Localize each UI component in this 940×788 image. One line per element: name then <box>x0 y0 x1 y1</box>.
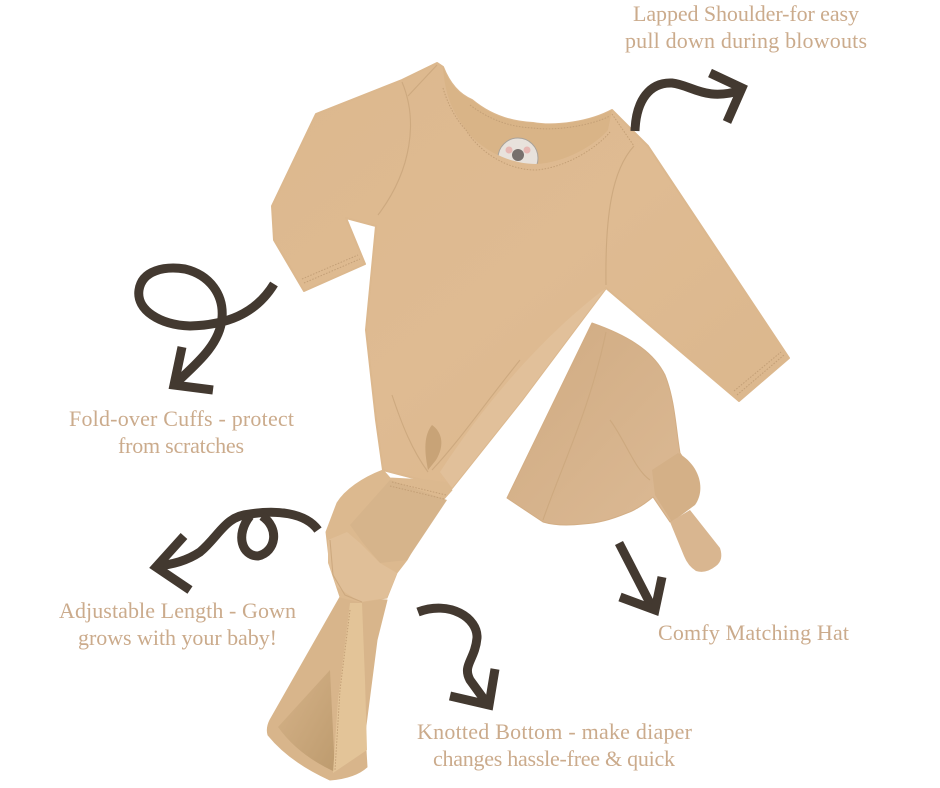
tail stitching <box>335 610 350 770</box>
knot <box>326 470 452 602</box>
hat fold <box>610 420 650 480</box>
label logo <box>498 138 538 164</box>
tail facing <box>333 603 367 773</box>
gown <box>267 63 789 780</box>
body folds <box>440 288 606 488</box>
arrow: cuffs <box>139 268 274 390</box>
cuffs <box>304 259 360 283</box>
arrow: knotted bottom <box>418 608 495 705</box>
sleeve seams <box>378 82 410 215</box>
caption: adjustable length: grows with your baby! <box>78 625 277 650</box>
hat crown <box>507 323 698 525</box>
hat <box>507 323 721 572</box>
gown body and sleeves <box>272 63 789 488</box>
caption: matching hat: Comfy Matching Hat <box>658 620 849 645</box>
neck interior <box>443 67 612 164</box>
knot lower fold <box>328 532 397 602</box>
caption: lapped shoulder: pull down during blowouts <box>625 28 867 53</box>
arrow: adjustable length <box>156 512 318 590</box>
caption: knotted bottom: changes hassle-free & quick <box>433 746 675 771</box>
knot front fold <box>350 480 447 563</box>
arrow: hat <box>619 543 662 610</box>
gown tail <box>267 597 387 780</box>
neckline stitching <box>443 88 610 170</box>
caption: lapped shoulder: Lapped Shoulder-for easy <box>633 1 859 26</box>
caption: lapped shoulder <box>625 1 867 53</box>
caption: adjustable length <box>59 598 296 650</box>
hat brim seam <box>543 332 606 520</box>
caption: knotted bottom <box>417 719 693 771</box>
caption: fold-over cuffs: Fold-over Cuffs - protect <box>69 406 294 431</box>
caption: knotted bottom: Knotted Bottom - make diaper <box>417 719 693 744</box>
caption: fold-over cuffs <box>69 406 294 458</box>
caption: adjustable length: Adjustable Length - Gown <box>59 598 296 623</box>
caption: fold-over cuffs: from scratches <box>118 433 244 458</box>
hat knot <box>652 453 700 522</box>
hat tail <box>670 510 721 572</box>
arrow: lapped shoulder <box>635 73 742 131</box>
tail inner shadow <box>278 670 335 772</box>
